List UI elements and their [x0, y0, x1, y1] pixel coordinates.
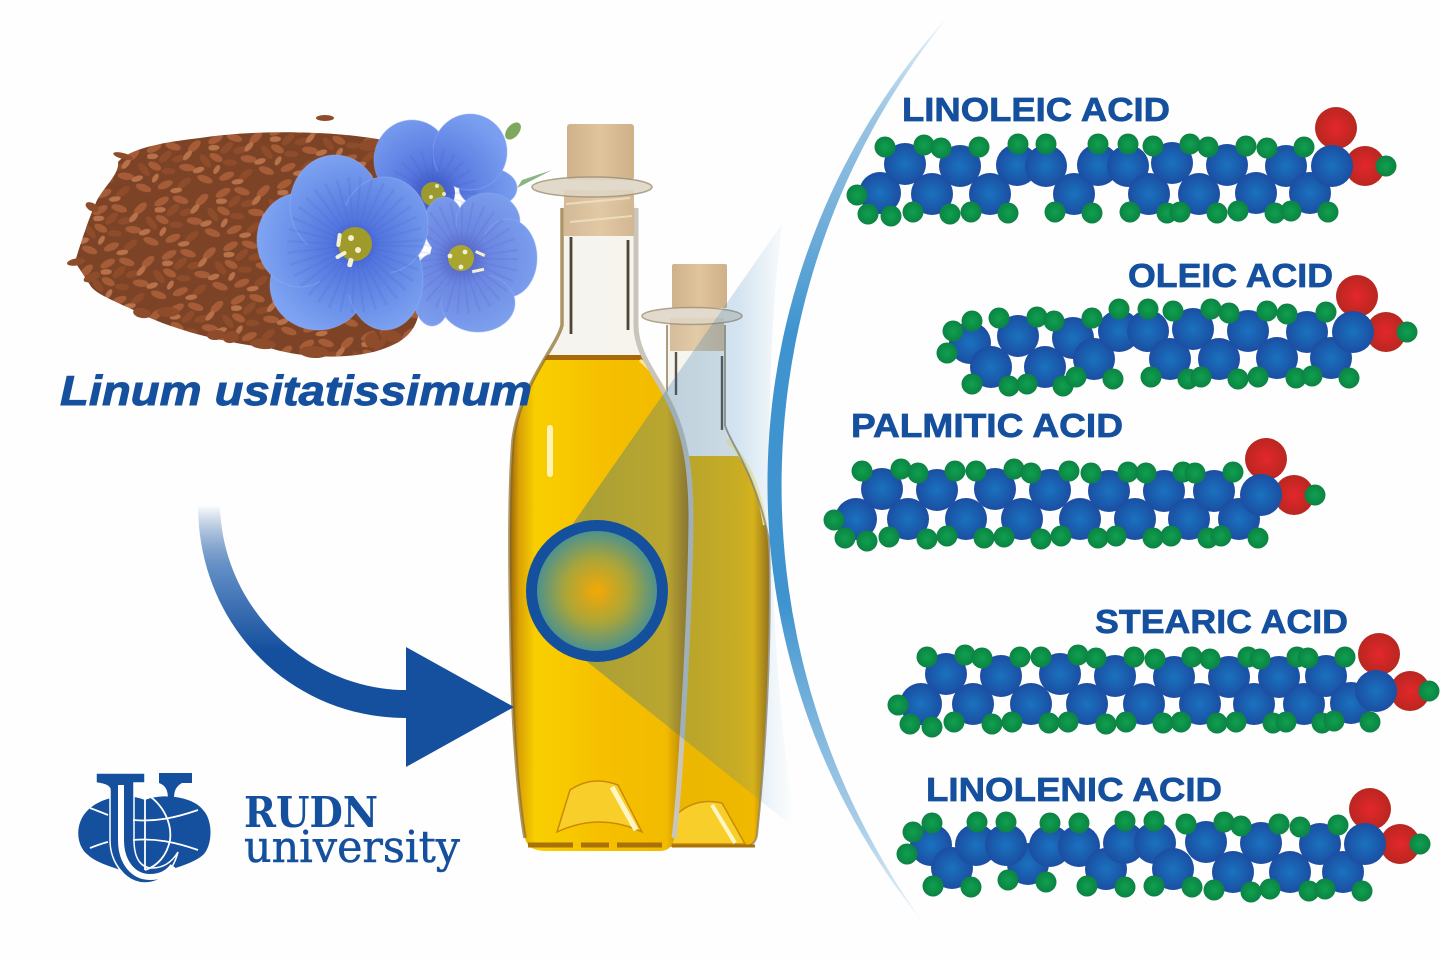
heading: oleic acid: OLEIC ACID: [1128, 257, 1333, 294]
curved divider arc: [767, 12, 952, 925]
heading: stearic acid: STEARIC ACID: [1095, 603, 1348, 640]
RUDN university wordmark: RUDN: [244, 788, 378, 837]
molecule: linolenic acid: [896, 788, 1430, 902]
zoom circle on oil: [532, 526, 662, 656]
process arrow: [198, 505, 514, 767]
flower: top back: [374, 114, 517, 215]
RUDN logo emblem: [78, 773, 210, 883]
heading: linolenic acid: LINOLENIC ACID: [926, 771, 1222, 808]
small oil bottle: [640, 264, 775, 851]
flax seeds pile: [67, 115, 420, 359]
flower: right: [412, 193, 537, 332]
heading: linoleic acid: LINOLEIC ACID: [902, 91, 1170, 128]
molecule: palmitic acid: [824, 438, 1326, 552]
large oil bottle: [505, 124, 695, 854]
molecule: oleic acid: [936, 275, 1418, 396]
RUDN university wordmark: [244, 788, 460, 873]
molecule: linoleic acid: [846, 107, 1396, 226]
RUDN university wordmark: university: [244, 822, 460, 873]
heading: palmitic acid: PALMITIC ACID: [851, 407, 1123, 444]
molecule: stearic acid: [888, 633, 1440, 738]
flower: front large: [257, 155, 428, 330]
stem and bud: [502, 119, 552, 188]
magnification cone: [572, 224, 797, 830]
species name: Linum usitatissimum: [60, 367, 532, 414]
